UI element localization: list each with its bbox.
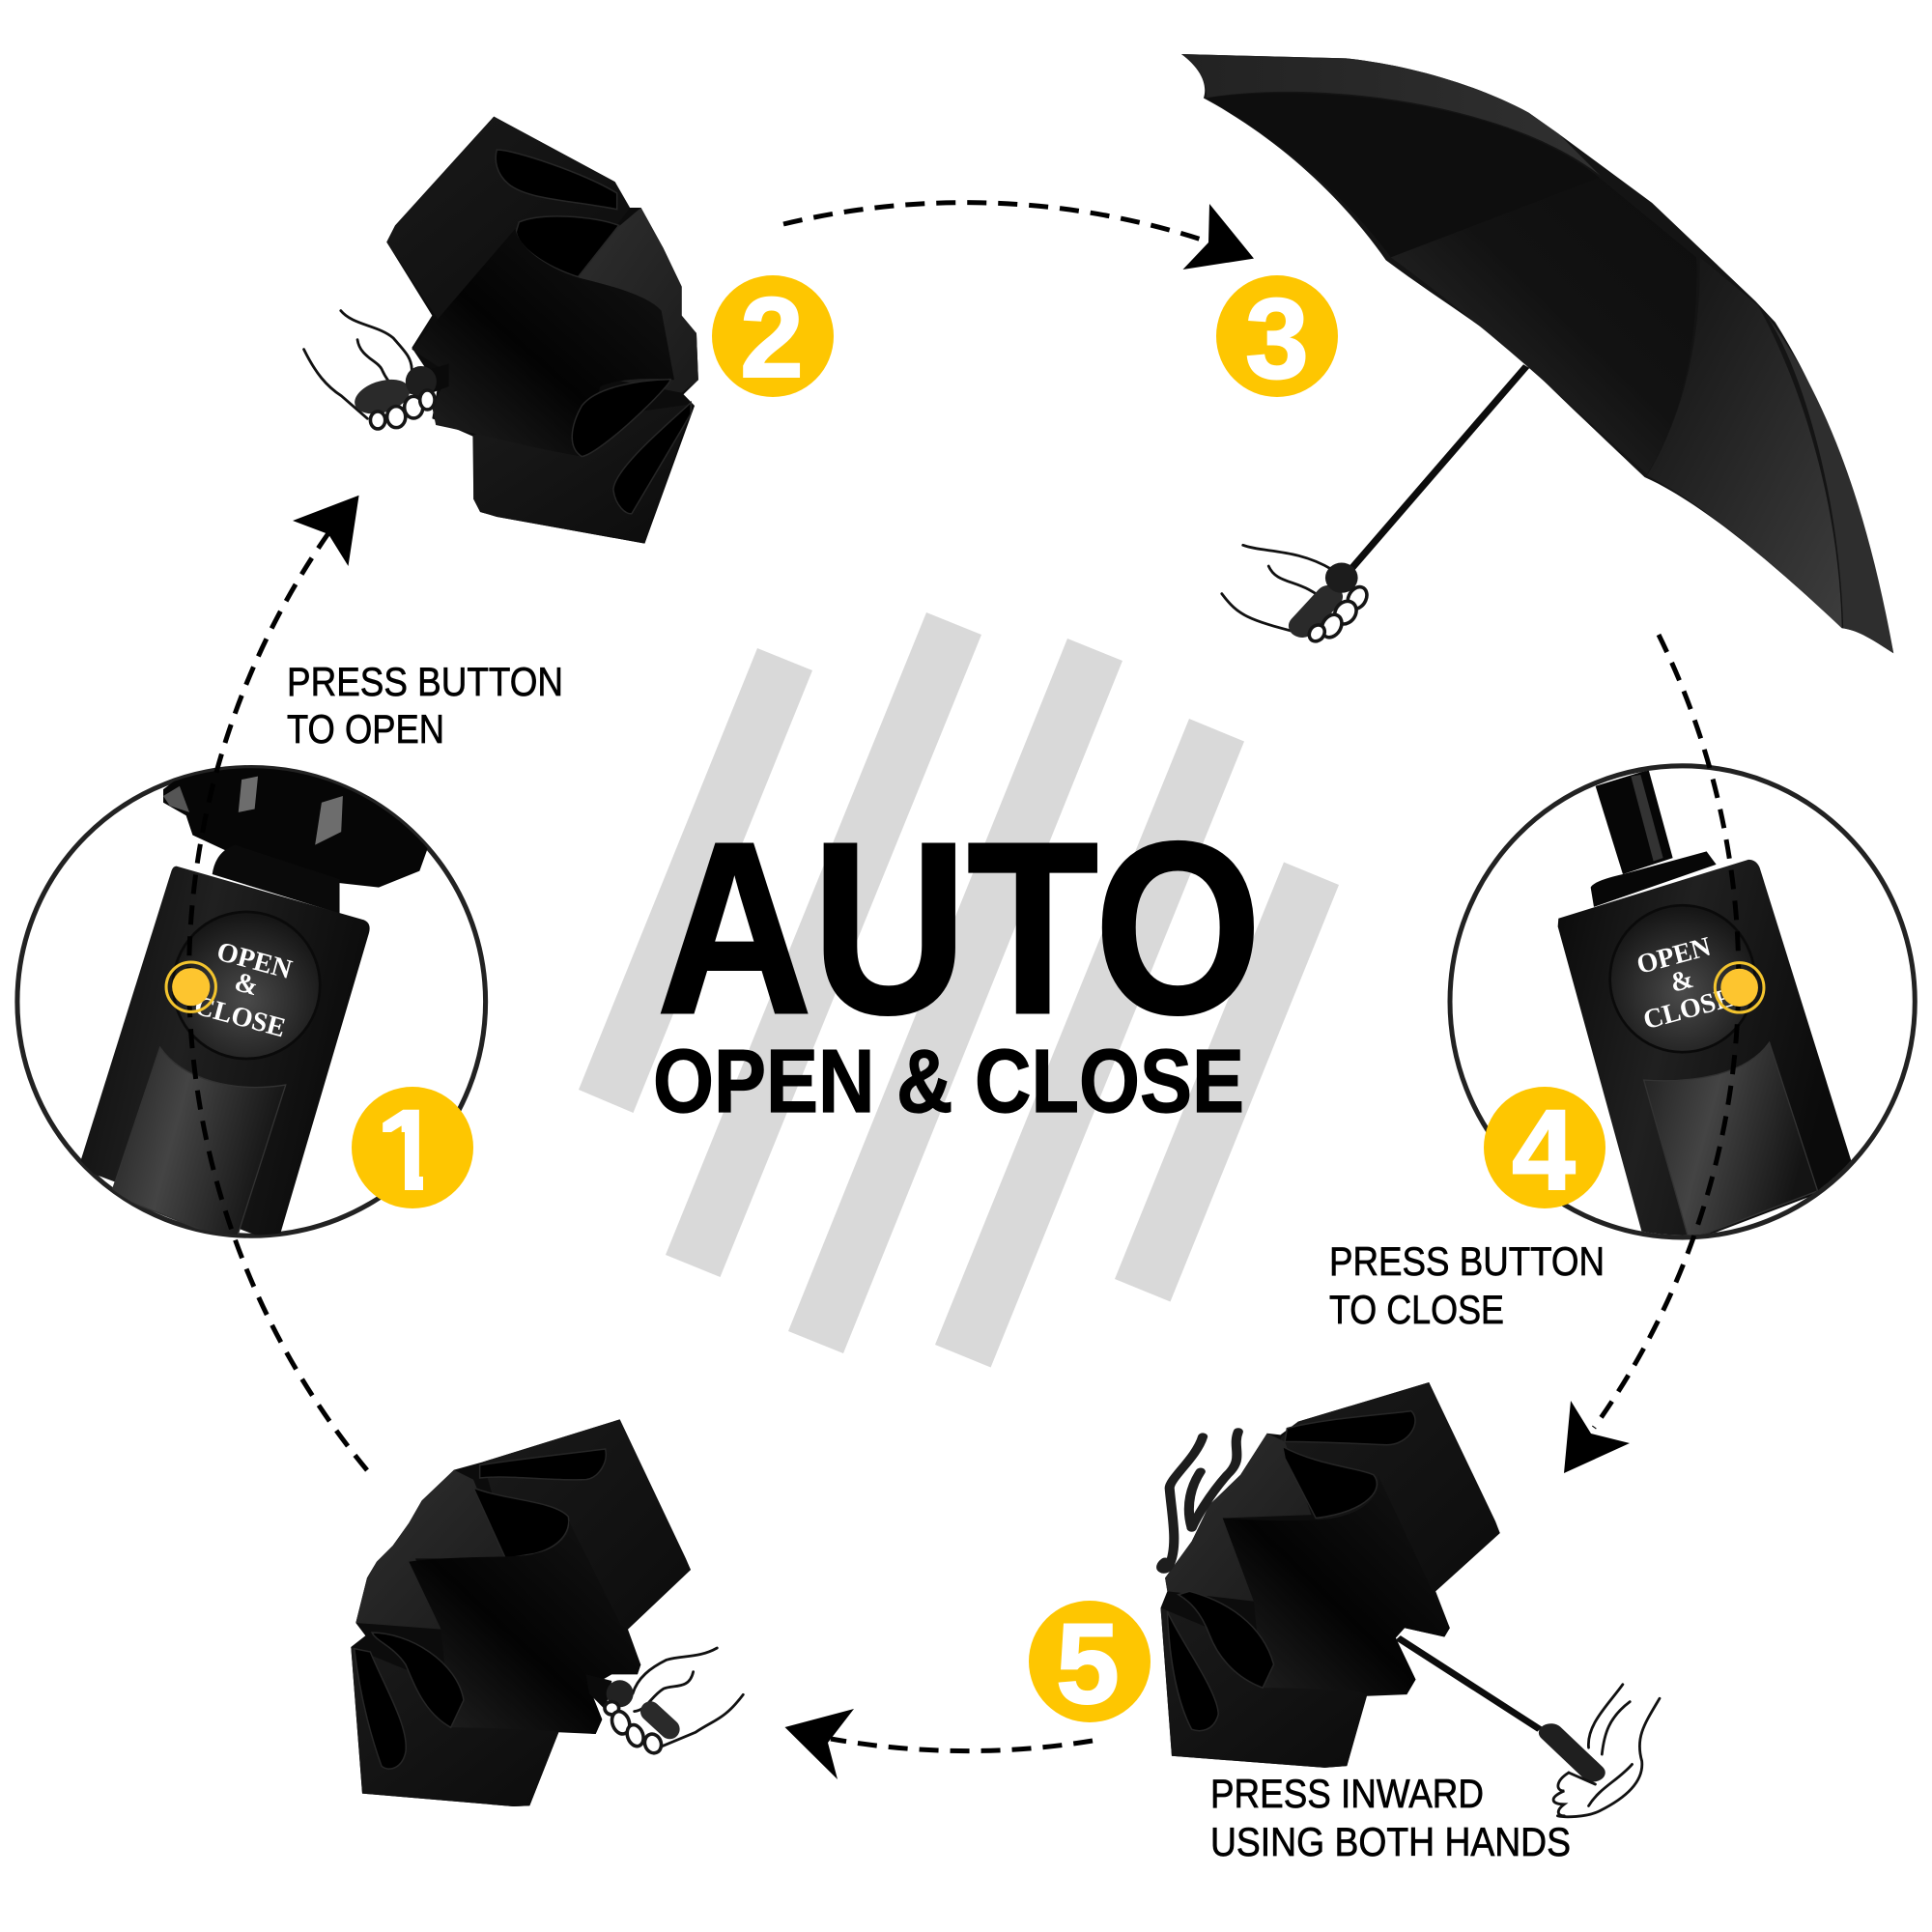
label: press button to open: PRESS BUTTON xyxy=(287,659,563,704)
closed umbrella with hand (final state) xyxy=(351,1419,743,1806)
umbrella being pressed closed with both hands (step 5) xyxy=(1161,1382,1660,1817)
arrowhead to step 5 xyxy=(1564,1401,1630,1473)
label: press inward using both hands: USING BOTH HANDS xyxy=(1210,1819,1571,1864)
shaft xyxy=(1398,1638,1540,1729)
umbrella fully open with hand (step 3) xyxy=(1181,54,1893,653)
label: press button to open xyxy=(287,659,563,752)
right hand outline xyxy=(1553,1685,1660,1817)
yellow press point, step 4 xyxy=(1715,963,1764,1012)
step badge 2: 2 xyxy=(740,274,804,402)
step badge 1 xyxy=(352,1087,473,1214)
hand gripping handle xyxy=(1222,545,1370,643)
dashed arc: step 1 to step 2 xyxy=(189,533,367,1470)
step badge 4: 4 xyxy=(1512,1087,1576,1214)
hand gripping handle xyxy=(586,1648,743,1755)
shaft xyxy=(1349,366,1526,572)
arrowhead to closing umbrella xyxy=(784,1709,854,1779)
step badge 3: 3 xyxy=(1245,275,1309,403)
arrowhead to step 3 xyxy=(1182,204,1254,270)
label: press button to open: TO OPEN xyxy=(287,706,444,752)
hand gripping handle xyxy=(304,311,449,429)
dashed arc: step 2 to step 3 xyxy=(783,203,1208,242)
step badge 5: 5 xyxy=(1056,1601,1120,1728)
label: press inward using both hands: PRESS INWARD xyxy=(1210,1771,1484,1816)
umbrella half open with hand (step 2) xyxy=(304,117,698,544)
dashed arc: step 3 to step 4 xyxy=(1594,635,1739,1428)
handle photo: & xyxy=(232,967,261,1002)
step badge 1: 1 xyxy=(376,1087,440,1214)
step badge 5 xyxy=(1029,1601,1151,1728)
label: press button to close xyxy=(1329,1238,1605,1332)
handle photo: CLOSE xyxy=(1640,982,1737,1036)
handle photo: OPEN xyxy=(1634,931,1714,980)
title: AUTO: AUTO xyxy=(657,791,1262,1065)
handle photo: OPEN xyxy=(213,937,296,985)
handle xyxy=(1551,1733,1593,1773)
yellow press point, step 1 xyxy=(166,962,215,1011)
label: press inward using both hands xyxy=(1210,1771,1571,1864)
dashed arc: step 5 to closed umbrella xyxy=(831,1739,1093,1751)
step 1 inset: button on handle xyxy=(17,760,486,1243)
subtitle: OPEN & CLOSE: OPEN & CLOSE xyxy=(653,1031,1244,1131)
step 4 inset: button on handle xyxy=(1450,766,1915,1243)
arrowhead to step 2 xyxy=(293,496,359,566)
step badge 3 xyxy=(1216,275,1338,403)
background diagonal stripes xyxy=(579,612,1339,1368)
handle photo: CLOSE xyxy=(191,991,289,1043)
handle photo xyxy=(78,760,428,1243)
inset circle outline xyxy=(17,768,486,1236)
inset circle outline xyxy=(1450,766,1915,1237)
step badge 2 xyxy=(712,274,834,402)
label: press button to close: TO CLOSE xyxy=(1329,1287,1504,1332)
handle photo: & xyxy=(1667,964,1696,999)
label: press button to close: PRESS BUTTON xyxy=(1329,1238,1605,1284)
step badge 4 xyxy=(1484,1087,1605,1214)
handle photo xyxy=(1558,770,1852,1243)
left hand outline xyxy=(1161,1432,1238,1570)
